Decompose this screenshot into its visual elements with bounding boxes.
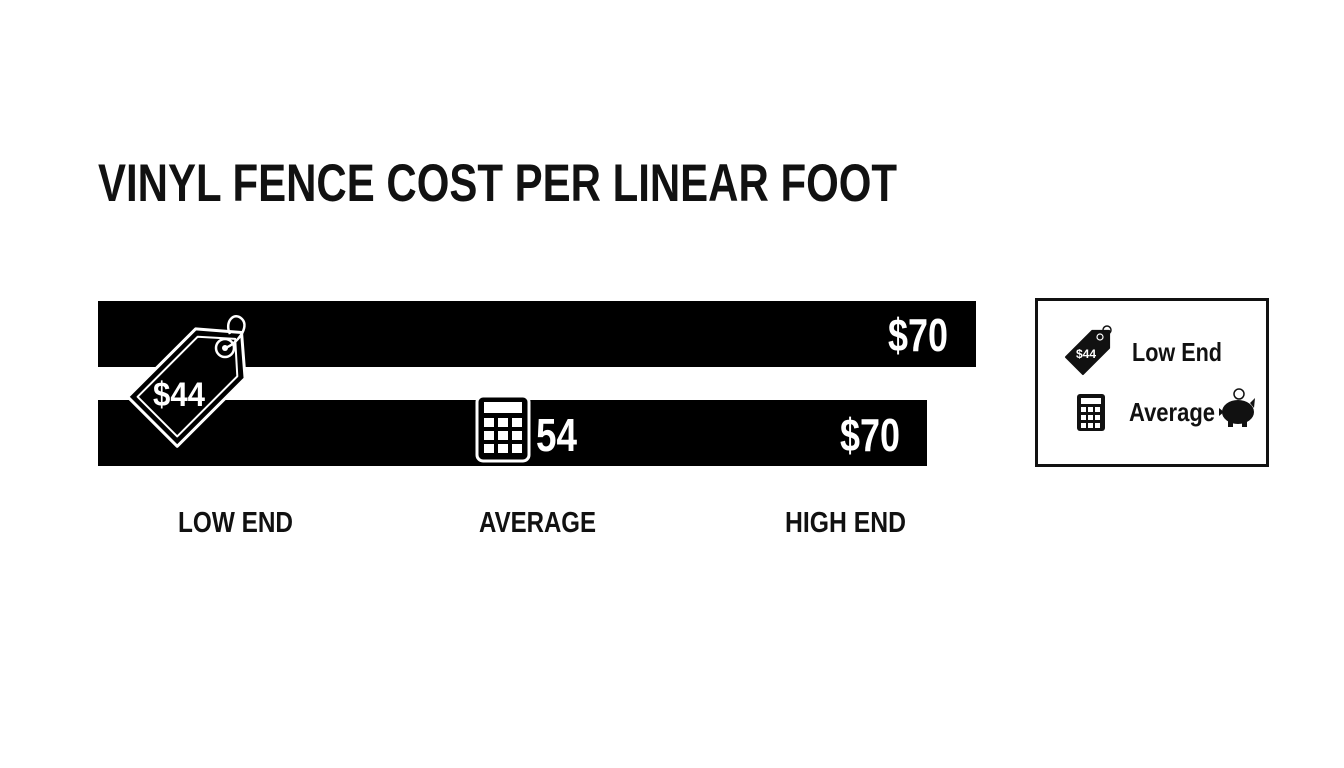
icon: price tag $44 — [128, 308, 266, 446]
legend icon: calculator — [1077, 394, 1105, 431]
legend — [1036, 300, 1268, 466]
legend icon: tag — [1066, 322, 1118, 374]
value: 54: 54 — [536, 409, 577, 461]
icon: price tag $44: $44 — [153, 376, 205, 414]
axis label: average: AVERAGE — [479, 507, 596, 539]
legend text: low end: Low End — [1132, 337, 1222, 367]
bar: high end — [98, 301, 976, 367]
legend icon: tag: $44 — [1076, 347, 1096, 361]
value: bottom $70: $70 — [840, 409, 900, 461]
icon: calculator — [477, 396, 529, 461]
axis label: low end: LOW END — [178, 507, 293, 539]
axis label: high end: HIGH END — [785, 507, 906, 539]
bar: average — [98, 400, 927, 466]
value: top $70: $70 — [888, 309, 948, 361]
legend text: average: Average — [1129, 397, 1215, 427]
legend icon: piggy bank — [1219, 389, 1255, 427]
title: VINYL FENCE COST PER LINEAR FOOT — [98, 154, 897, 213]
